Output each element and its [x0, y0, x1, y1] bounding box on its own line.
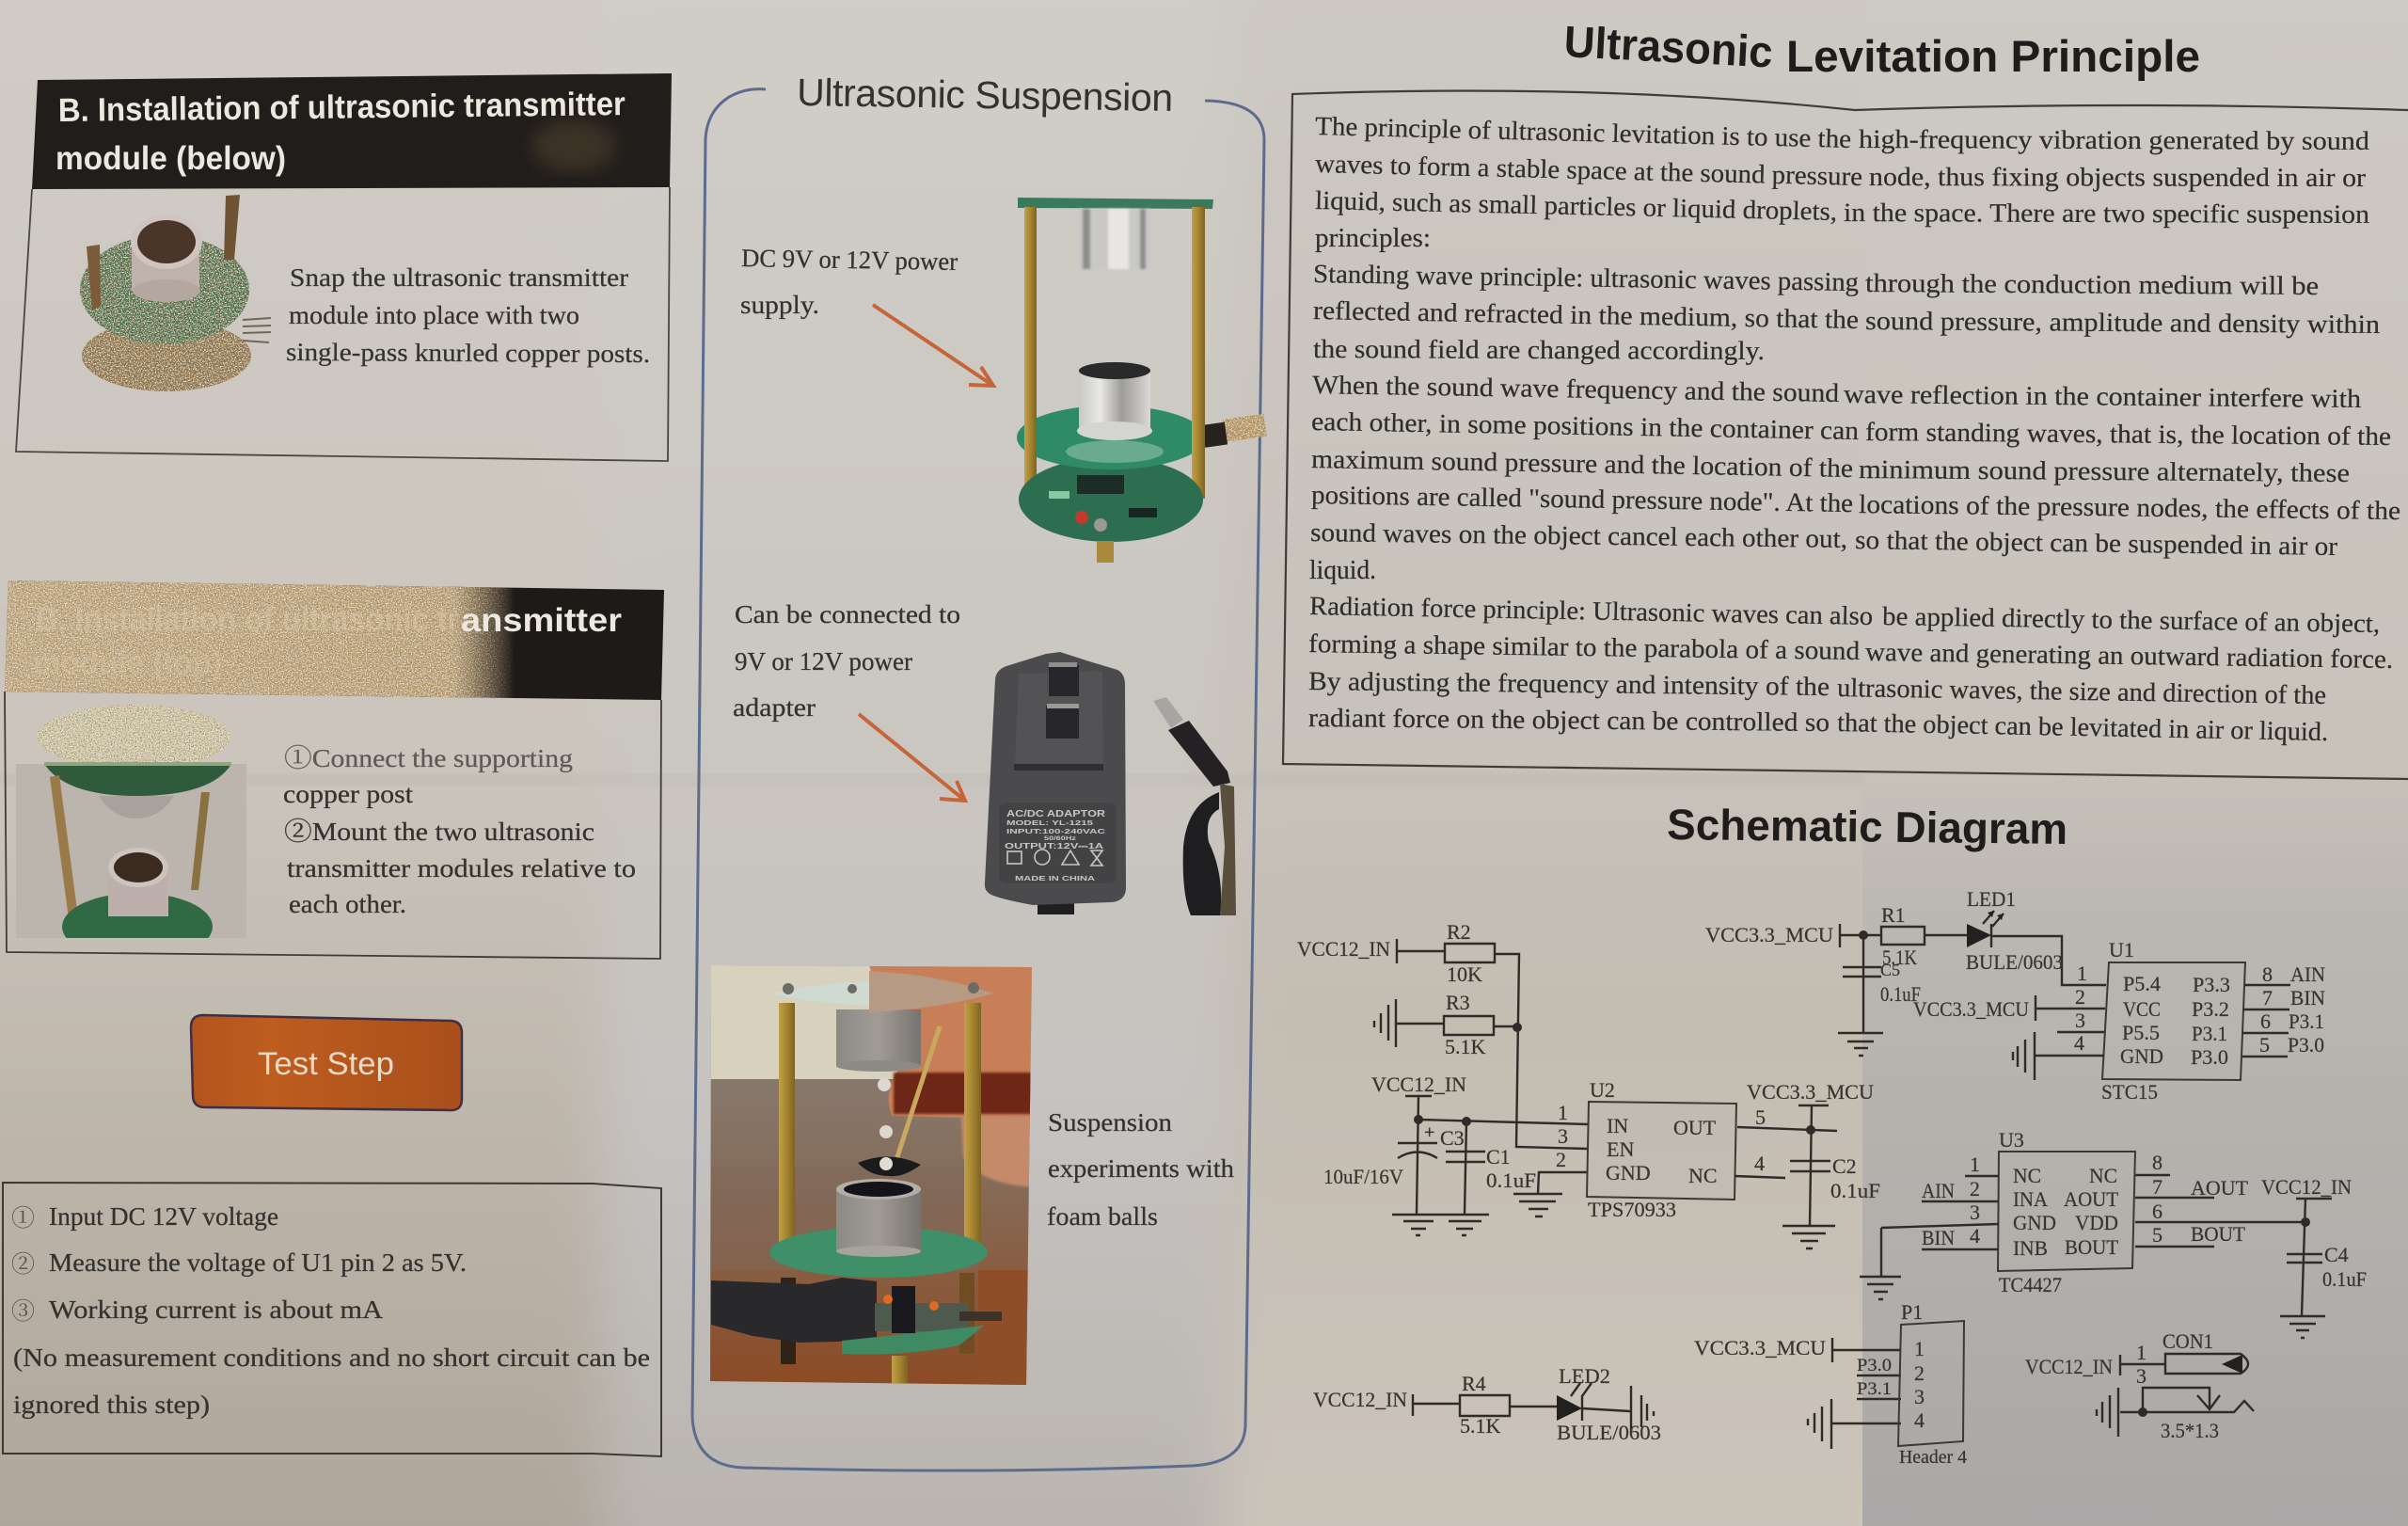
circuit: U2 power regulator: NC: [1688, 1164, 1718, 1187]
circuit: U2 power regulator: +: [1424, 1122, 1434, 1143]
circuit: U1 STC15 MCU: C5: [1880, 961, 1900, 979]
paragraph: pressure nodes: each other, in some positions in the container can: [1311, 407, 1859, 446]
circuit: U3 TC4427 driver: AOUT: [2064, 1187, 2119, 1211]
circuit: U3 TC4427 driver: NC: [2013, 1164, 2041, 1187]
title: Ultrasonic Levitation Principle: [1562, 16, 2200, 81]
circuit: U2 power regulator: 4: [1754, 1152, 1765, 1175]
circuit: U1 STC15 MCU: BULE/0603: [1966, 950, 2063, 974]
paragraph: pressure nodes: liquid.: [1309, 556, 1376, 585]
circuit: U2 power regulator: 0.1uF: [1830, 1179, 1880, 1202]
panel top text: ①Connect the supporting: [284, 744, 573, 772]
circuit: U3 TC4427 driver: 0.1uF: [2322, 1267, 2367, 1291]
panel B header bar: module (below): [55, 140, 286, 177]
caption: power adapter: 9V or 12V power: [735, 647, 912, 676]
panel: test steps list: [3, 1183, 661, 1456]
circuit: LED2 indicator: LED2: [1559, 1364, 1610, 1388]
panel top text: ②Mount the two ultrasonic: [284, 818, 594, 846]
circuit: U3 TC4427 driver: 8: [2152, 1151, 2162, 1174]
circuit: U1 STC15 MCU: 0.1uF: [1880, 982, 1921, 1006]
circuit: P1 header: Header 4: [1899, 1447, 1967, 1468]
circuit: U2 power regulator: U2: [1590, 1078, 1615, 1102]
circuit: U2 power regulator: 2: [1556, 1148, 1566, 1171]
circuit: U1 STC15 MCU: P3.1: [2289, 1009, 2324, 1033]
circuit: U1 STC15 MCU: 2: [2075, 985, 2085, 1009]
caption: foam balls: foam balls: [1047, 1202, 1158, 1231]
circuit: U1 STC15 MCU: VCC3.3_MCU: [1913, 997, 2029, 1021]
paragraph: introduction: [1315, 112, 2369, 253]
photo: levitation kit: [1017, 198, 1267, 563]
panel: test steps list: ③: [11, 1298, 35, 1325]
title: Ultrasonic Levitation Principle: Ultrasonic: [1562, 16, 1774, 77]
panel: test steps list: ignored this step): [13, 1391, 210, 1419]
panel top header bar: [5, 580, 664, 700]
circuit: U2 power regulator: C2: [1832, 1154, 1857, 1178]
paragraph: standing wave principle: the sound field are changed accordingly.: [1313, 335, 1765, 366]
paragraph: introduction: high-frequency vibration generated by sound: [1859, 125, 2369, 156]
circuit: U3 TC4427 driver: AOUT: [2191, 1176, 2249, 1200]
circuit: U2 power regulator: [1297, 920, 1880, 1248]
panel: test steps list: Working current is about mA: [49, 1296, 384, 1324]
circuit: U3 TC4427 driver: 6: [2152, 1200, 2162, 1223]
photo: AC/DC adapter: INPUT:100-240VAC: [1006, 827, 1106, 835]
circuit: U3 TC4427 driver: VDD: [2075, 1211, 2118, 1234]
circuit: U2 power regulator: VCC3.3_MCU: [1747, 1080, 1874, 1104]
circuit: CON1 power jack: 1: [2136, 1341, 2147, 1364]
circuit: U2 power regulator: VCC12_IN: [1371, 1073, 1466, 1096]
caption: power supply: supply.: [740, 291, 819, 319]
paragraph: standing wave principle: Standing wave principle: ultrasonic waves passing: [1313, 260, 1859, 297]
paragraph: standing wave principle: sound pressure, amplitude and density within: [1865, 307, 2380, 340]
circuit: U3 TC4427 driver: C4: [2324, 1243, 2349, 1266]
paragraph: pressure nodes: maximum sound pressure and the location of the: [1311, 445, 1853, 484]
photo: foam ball experiment: [705, 960, 1035, 1389]
caption: power adapter: Can be connected to: [735, 600, 960, 628]
circuit: U1 STC15 MCU: P3.0: [2191, 1045, 2228, 1069]
circuit: U1 STC15 MCU: 8: [2262, 962, 2273, 986]
panel: test steps list: Input DC 12V voltage: [49, 1202, 278, 1231]
arrow to adapter: [859, 714, 965, 801]
circuit: U1 STC15 MCU: [1705, 887, 2325, 1104]
circuit: P1 header: 4: [1914, 1408, 1925, 1432]
paragraph: introduction: The principle of ultrasonic levitation is to use the: [1315, 112, 1851, 154]
circuit: U1 STC15 MCU: 3: [2075, 1009, 2085, 1032]
circuit: U3 TC4427 driver: BOUT: [2065, 1235, 2119, 1259]
panel B text: module into place with two: [289, 301, 579, 329]
paragraph: introduction: in the space. There are two specific suspension: [1844, 199, 2369, 230]
paragraph: pressure nodes: locations of the pressure nodes, the effects of the: [1859, 490, 2400, 526]
caption: power supply: [740, 244, 958, 319]
circuit: P1 header: [1694, 1300, 1967, 1468]
panel: Ultrasonic Suspension: [692, 71, 1267, 1470]
circuit: U2 power regulator: OUT: [1673, 1116, 1717, 1139]
panel B text: [286, 263, 650, 368]
photo: AC/DC adapter: MODEL: YL-1215: [1006, 819, 1093, 827]
panel top header bar: ansmitter: [461, 602, 622, 639]
panel B text: Snap the ultrasonic transmitter: [290, 263, 628, 292]
circuit: U2 power regulator: VCC12_IN: [1297, 937, 1390, 961]
panel frame: [1283, 90, 2408, 779]
circuit: U2 power regulator: 5.1K: [1445, 1035, 1486, 1058]
circuit: U2 power regulator: 5: [1755, 1105, 1766, 1129]
panel: principle text: [1283, 90, 2408, 779]
paragraph: radiation force principle: ultrasonic waves, the size and direction of the: [1837, 674, 2326, 710]
panel B body frame: [16, 187, 670, 461]
button: Test Step: Test Step: [258, 1046, 394, 1082]
panel: test steps list: ②: [11, 1251, 35, 1278]
circuit: U2 power regulator: IN: [1607, 1114, 1628, 1137]
caption: foam balls: experiments with: [1048, 1154, 1235, 1183]
circuit: CON1 power jack: VCC12_IN: [2025, 1355, 2113, 1378]
circuit: U2 power regulator: C3: [1440, 1126, 1465, 1150]
circuit: U3 TC4427 driver: 4: [1970, 1224, 1980, 1248]
paragraph: radiation force principle: forming a shape similar to the parabola of a sound: [1308, 629, 1860, 666]
circuit: U1 STC15 MCU: 5.1K: [1882, 946, 1917, 969]
circuit: U2 power regulator: GND: [1606, 1161, 1651, 1184]
photo: AC/DC adapter: 50/60Hz: [1044, 835, 1077, 842]
circuit: P1 header: 3: [1914, 1385, 1925, 1408]
icon: two stacked modules photo: [16, 705, 246, 961]
circuit: U1 STC15 MCU: P3.1: [2192, 1022, 2227, 1045]
circuit: U3 TC4427 driver: [1860, 1128, 2367, 1338]
arrow to product: [873, 305, 993, 386]
photo: AC/DC adapter: MADE IN CHINA: [1015, 874, 1096, 882]
paragraph: introduction: waves to form a stable space at the sound pressure: [1315, 150, 1862, 192]
panel top body frame: [5, 691, 661, 959]
icon: transmitter module photo: [80, 195, 271, 391]
photo: AC/DC adapter: OUTPUT:12V⎓1A: [1005, 842, 1103, 850]
circuit: U3 TC4427 driver: U3: [1999, 1128, 2024, 1152]
panel top text: [283, 744, 636, 918]
paragraph: radiation force principle: wave and generating an outward radiation force.: [1865, 638, 2393, 675]
circuit: U2 power regulator: 10uF/16V: [1323, 1165, 1403, 1188]
circuit: U1 STC15 MCU: P3.2: [2192, 997, 2229, 1021]
circuit: U2 power regulator: 3: [1558, 1124, 1568, 1148]
panel B text: single-pass knurled copper posts.: [286, 338, 650, 368]
circuit: U1 STC15 MCU: GND: [2120, 1044, 2163, 1068]
circuit: U3 TC4427 driver: 3: [1970, 1200, 1980, 1224]
circuit: U3 TC4427 driver: BOUT: [2191, 1222, 2246, 1246]
paragraph: introduction: liquid, such as small particles or liquid droplets,: [1315, 186, 1837, 227]
panel top text: transmitter modules relative to: [287, 854, 636, 882]
circuit: U1 STC15 MCU: P5.4: [2123, 972, 2161, 995]
panel rounded border: [692, 89, 1264, 1470]
title: Ultrasonic Levitation Principle: Levitation Principle: [1786, 31, 2200, 81]
circuit: U2 power regulator: EN: [1607, 1137, 1634, 1161]
paragraph: radiation force principle: radiant force on the object can be controlled so: [1308, 704, 1830, 738]
circuit: U1 STC15 MCU: LED1: [1967, 887, 2016, 911]
panel top text: each other.: [289, 890, 406, 918]
circuit: U1 STC15 MCU: AIN: [2290, 962, 2325, 986]
circuit: P1 header: P3.1: [1857, 1379, 1892, 1399]
circuit: LED2 indicator: VCC12_IN: [1313, 1388, 1407, 1411]
circuit: U3 TC4427 driver: 7: [2152, 1175, 2162, 1199]
panel: B installation below: [16, 73, 672, 461]
circuit: U1 STC15 MCU: U1: [2109, 938, 2134, 962]
caption: power supply: DC 9V or 12V power: [741, 244, 958, 276]
paragraph: pressure nodes: sound waves on the object cancel each other out,: [1310, 518, 1847, 554]
button: Test Step: [191, 1015, 462, 1110]
circuit: U1 STC15 MCU: 7: [2262, 986, 2273, 1009]
circuit: U1 STC15 MCU: STC15: [2101, 1080, 2158, 1104]
circuit: U3 TC4427 driver: INB: [2013, 1236, 2048, 1260]
circuit: LED2 indicator: BULE/0603: [1557, 1421, 1661, 1444]
circuit: U3 TC4427 driver: INA: [2013, 1187, 2048, 1211]
paragraph: standing wave principle: reflected and refracted in the medium, so that the: [1313, 296, 1859, 335]
paragraph: standing wave principle: through the conduction medium will be: [1865, 269, 2319, 301]
circuit: U2 power regulator: 1: [1558, 1101, 1568, 1124]
circuit: U3 TC4427 driver: BIN: [1922, 1226, 1955, 1249]
circuit: U2 power regulator: TPS70933: [1588, 1198, 1676, 1221]
panel: test steps list: (No measurement conditions and no short circuit can be: [13, 1343, 650, 1372]
title: Schematic Diagram: Schematic Diagram: [1667, 800, 2067, 853]
photo: AC/DC adapter: AC/DC ADAPTOR: [1006, 809, 1106, 819]
circuit: U1 STC15 MCU: VCC3.3_MCU: [1705, 923, 1833, 946]
paragraph: radiation force principle: that the object can be levitated in air or liquid.: [1837, 708, 2328, 747]
paragraph: pressure nodes: minimum sound pressure alternately, these: [1859, 455, 2350, 488]
circuit: P1 header: 1: [1914, 1337, 1925, 1360]
paragraph: pressure nodes: When the sound wave frequency and the sound: [1312, 371, 1839, 408]
circuit: U3 TC4427 driver: GND: [2013, 1211, 2056, 1234]
circuit: U1 STC15 MCU: BIN: [2290, 986, 2325, 1009]
paragraph: pressure nodes: [1309, 371, 2400, 585]
circuit: U3 TC4427 driver: TC4427: [1999, 1273, 2062, 1296]
circuit: U3 TC4427 driver: 2: [1970, 1177, 1980, 1200]
circuit: U3 TC4427 driver: 1: [1970, 1152, 1980, 1176]
circuit: U3 TC4427 driver: VCC12_IN: [2261, 1175, 2352, 1199]
panel B header bar: [32, 73, 672, 189]
circuit: LED2 indicator: 5.1K: [1460, 1414, 1501, 1438]
circuit: U1 STC15 MCU: P3.3: [2193, 973, 2230, 996]
circuit: LED2 indicator: [1313, 1364, 1661, 1444]
circuit: P1 header: 2: [1914, 1361, 1925, 1385]
panel: test steps list: ①: [11, 1205, 35, 1232]
paragraph: pressure nodes: wave reflection in the container interfere with: [1844, 380, 2361, 414]
circuit: U1 STC15 MCU: P3.0: [2288, 1033, 2324, 1057]
paragraph: pressure nodes: so that the object can be suspended in air or: [1855, 526, 2338, 562]
caption: power adapter: [733, 600, 960, 722]
circuit: U2 power regulator: C1: [1486, 1145, 1511, 1168]
circuit: U1 STC15 MCU: 4: [2074, 1031, 2084, 1055]
panel top header bar: B. Installation of ultrasonic tr: [36, 601, 459, 638]
paragraph: introduction: node, thus fixing objects suspended in air or: [1869, 163, 2367, 193]
paragraph: standing wave principle: [1313, 260, 2380, 366]
panel top header bar: module (top): [33, 644, 222, 681]
circuit: CON1 power jack: 3: [2136, 1364, 2147, 1388]
circuit: U3 TC4427 driver: AIN: [1922, 1179, 1955, 1202]
circuit: P1 header: VCC3.3_MCU: [1694, 1336, 1826, 1359]
photo: AC/DC adapter: [985, 652, 1236, 915]
circuit: U1 STC15 MCU: 5: [2259, 1033, 2270, 1057]
paragraph: pressure nodes: positions are called "sound pressure node". At the: [1311, 481, 1853, 518]
circuit: U2 power regulator: 10K: [1447, 962, 1482, 986]
paragraph: introduction: principles:: [1315, 224, 1431, 253]
circuit: U1 STC15 MCU: R1: [1881, 903, 1906, 927]
circuit: LED2 indicator: R4: [1462, 1372, 1486, 1395]
caption: power adapter: adapter: [733, 693, 816, 722]
circuit: U1 STC15 MCU: VCC: [2123, 997, 2161, 1021]
circuit: U3 TC4427 driver: NC: [2089, 1164, 2117, 1187]
circuit: CON1 power jack: [2025, 1329, 2254, 1442]
circuit: CON1 power jack: CON1: [2162, 1329, 2213, 1353]
circuit: U2 power regulator: R2: [1447, 920, 1471, 944]
paragraph: radiation force principle: [1308, 592, 2393, 747]
panel: installation top: [5, 580, 664, 961]
circuit: U2 power regulator: 0.1uF: [1486, 1168, 1536, 1192]
panel B header bar: B. Installation of ultrasonic transmitter: [58, 86, 626, 129]
panel: test steps list: Measure the voltage of U1 pin 2 as 5V.: [49, 1248, 467, 1277]
circuit: U1 STC15 MCU: 6: [2260, 1009, 2271, 1033]
circuit: U1 STC15 MCU: 1: [2077, 962, 2087, 985]
icon: DC plug and cable: [1153, 697, 1236, 915]
caption: foam balls: [1047, 1108, 1235, 1231]
circuit: U2 power regulator: R3: [1446, 991, 1470, 1014]
panel title: Ultrasonic Suspension: [797, 71, 1174, 119]
circuit: P1 header: P1: [1901, 1300, 1923, 1324]
paragraph: radiation force principle: be applied directly to the surface of an object,: [1882, 602, 2380, 639]
paragraph: pressure nodes: form standing waves, that is, the location of the: [1865, 418, 2391, 452]
paragraph: radiation force principle: By adjusting the frequency and intensity of the: [1308, 667, 1830, 702]
circuit: P1 header: P3.0: [1857, 1356, 1892, 1375]
paragraph: radiation force principle: Radiation force principle: Ultrasonic waves can also: [1309, 592, 1873, 631]
circuit: U1 STC15 MCU: P5.5: [2122, 1021, 2160, 1044]
circuit: U3 TC4427 driver: 5: [2152, 1223, 2162, 1247]
panel top text: copper post: [283, 780, 414, 808]
caption: foam balls: Suspension: [1048, 1108, 1173, 1137]
circuit: CON1 power jack: 3.5*1.3: [2161, 1419, 2219, 1442]
schematic diagram: [1297, 887, 2367, 1468]
